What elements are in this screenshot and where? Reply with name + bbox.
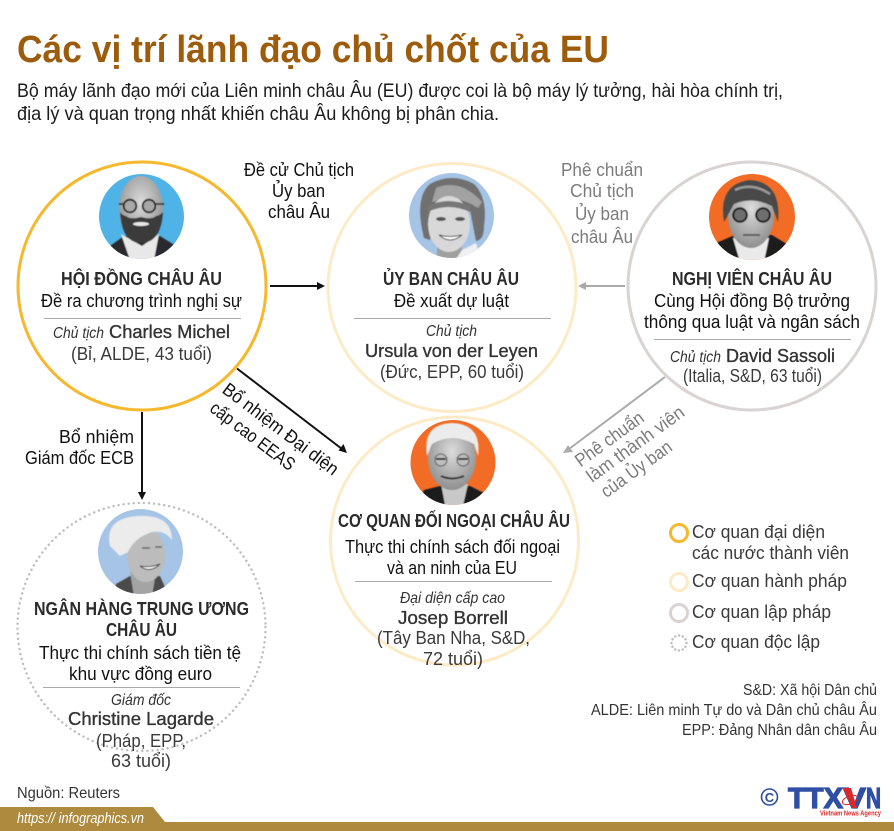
arrow label: Phê chuẩn làm thành viên của Ủy ban: làm thành viên bbox=[582, 401, 688, 486]
abbreviations note: S&D: Xã hội Dân chủ bbox=[743, 682, 877, 699]
panel: Cơ quan đối ngoại châu Âu bbox=[330, 417, 578, 669]
heading: CƠ QUAN ĐỐI NGOẠI CHÂU ÂU bbox=[338, 510, 570, 531]
leader bbox=[377, 590, 530, 669]
leader: Christine Lagarde bbox=[68, 708, 214, 729]
panel: Ngân hàng Trung ương châu Âu bbox=[18, 503, 266, 771]
arrow label: Bổ nhiệm Giám đốc ECB bbox=[25, 426, 134, 468]
arrow label: Phê chuẩn Chủ tịch Ủy ban châu Âu: Ủy ban bbox=[575, 203, 629, 224]
role bbox=[345, 536, 560, 578]
logo: TTXVN: C bbox=[765, 790, 775, 805]
leader: Ursula von der Leyen bbox=[365, 340, 538, 361]
role: Cùng Hội đồng Bộ trưởng bbox=[654, 290, 850, 311]
arrow: Nghị viện to Ủy ban bbox=[578, 282, 625, 290]
role: khu vực đồng euro bbox=[69, 663, 212, 684]
portrait: David Sassoli bbox=[708, 174, 796, 264]
logo: TTXVN: V bbox=[843, 783, 867, 815]
abbreviations note: EPP: Đảng Nhân dân châu Âu bbox=[682, 720, 877, 739]
leader bbox=[53, 321, 230, 364]
arrow label: Phê chuẩn Chủ tịch Ủy ban châu Âu: châu Âu bbox=[571, 226, 633, 247]
role bbox=[644, 290, 860, 332]
arrow: Hội đồng to Cơ quan đối ngoại bbox=[237, 368, 347, 453]
logo: TTXVN: N bbox=[866, 783, 881, 815]
leader: David Sassoli bbox=[726, 345, 835, 366]
leader bbox=[670, 345, 835, 386]
role: thông qua luật và ngân sách bbox=[644, 311, 860, 332]
leader: (Bỉ, ALDE, 43 tuổi) bbox=[71, 343, 212, 364]
role: Thực thi chính sách tiền tệ bbox=[39, 642, 241, 663]
heading: CHÂU ÂU bbox=[106, 619, 177, 640]
intro text: Bộ máy lãnh đạo mới của Liên minh châu Âu (EU) được coi là bộ máy lý tưởng, hài hòa chính trị, bbox=[17, 79, 783, 102]
leader: Chủ tịch bbox=[670, 349, 721, 366]
heading: NGÂN HÀNG TRUNG ƯƠNG bbox=[34, 598, 249, 619]
arrow label: Bổ nhiệm Giám đốc ECB: Giám đốc ECB bbox=[25, 447, 134, 468]
source: Nguồn: Reuters bbox=[17, 785, 120, 802]
logo: TTXVN: TTX bbox=[788, 783, 844, 815]
heading: NGHỊ VIÊN CHÂU ÂU bbox=[672, 268, 832, 289]
arrow label: Phê chuẩn Chủ tịch Ủy ban châu Âu: Phê chuẩn bbox=[561, 159, 643, 180]
leader: 63 tuổi) bbox=[111, 750, 171, 771]
leader bbox=[68, 692, 214, 771]
logo: TTXVN: Vietnam News Agency bbox=[820, 810, 881, 818]
legend item: độc lập: Cơ quan độc lập bbox=[692, 631, 820, 652]
website url: https:// infographics.vn bbox=[17, 810, 144, 827]
leader: (Pháp, EPP, bbox=[96, 730, 186, 751]
leader: (Tây Ban Nha, S&D, bbox=[377, 627, 530, 648]
legend item: lập pháp: Cơ quan lập pháp bbox=[692, 601, 831, 622]
leader: Charles Michel bbox=[109, 321, 230, 342]
arrow label: Đề cử Chủ tịch Ủy ban châu Âu: châu Âu bbox=[268, 201, 330, 222]
leader: Josep Borrell bbox=[398, 607, 508, 628]
leader: Giám đốc bbox=[111, 692, 171, 709]
arrow label: Đề cử Chủ tịch Ủy ban châu Âu: Đề cử Chủ tịch bbox=[244, 159, 354, 180]
legend item: đại diện: các nước thành viên bbox=[692, 542, 849, 563]
arrow: Hội đồng to Ngân hàng Trung ương bbox=[138, 412, 146, 500]
intro text bbox=[17, 79, 783, 125]
arrow: Nghị viện to Cơ quan đối ngoại bbox=[563, 377, 665, 453]
leader: Chủ tịch bbox=[53, 325, 104, 342]
footer band bbox=[0, 807, 894, 831]
title: Các vị trí lãnh đạo chủ chốt của EU bbox=[17, 29, 609, 71]
legend item: hành pháp: Cơ quan hành pháp bbox=[692, 570, 847, 591]
legend bbox=[670, 521, 849, 652]
panel: Ủy ban châu Âu bbox=[328, 164, 576, 412]
leader bbox=[365, 323, 538, 382]
leader: Chủ tịch bbox=[426, 323, 477, 340]
leader: 72 tuổi) bbox=[423, 648, 483, 669]
heading bbox=[34, 598, 249, 640]
arrow label: Bổ nhiệm Đại diện cấp cao EEAS: Bổ nhiệm Đại diện bbox=[219, 378, 343, 479]
portrait: Christine Lagarde bbox=[98, 508, 184, 598]
role: Đề xuất dự luật bbox=[394, 290, 509, 311]
arrow label: Phê chuẩn làm thành viên của Ủy ban: của Ủy ban bbox=[596, 436, 676, 502]
portrait: Josep Borrell bbox=[410, 420, 496, 510]
portrait: Charles Michel bbox=[98, 174, 184, 262]
role: Đề ra chương trình nghị sự bbox=[41, 290, 242, 311]
arrow label: Bổ nhiệm Giám đốc ECB: Bổ nhiệm bbox=[59, 426, 134, 447]
intro text: địa lý và quan trọng nhất khiến châu Âu không bị phân chia. bbox=[17, 102, 499, 125]
panel: Hội đồng châu Âu bbox=[18, 162, 266, 410]
portrait: Ursula von der Leyen bbox=[408, 172, 494, 262]
leader: Đại diện cấp cao bbox=[400, 590, 505, 607]
panel: Nghị viện châu Âu bbox=[628, 162, 876, 410]
legend item: đại diện: Cơ quan đại diện bbox=[692, 521, 825, 542]
leader: (Đức, EPP, 60 tuổi) bbox=[380, 361, 524, 382]
arrow label: Phê chuẩn làm thành viên của Ủy ban: Phê chuẩn bbox=[571, 407, 648, 471]
role bbox=[39, 642, 241, 684]
role: và an ninh của EU bbox=[387, 557, 517, 578]
logo: TTXVN bbox=[762, 783, 881, 818]
heading: HỘI ĐỒNG CHÂU ÂU bbox=[61, 268, 222, 289]
legend item: đại diện bbox=[670, 521, 849, 563]
arrow label: Đề cử Chủ tịch Ủy ban châu Âu bbox=[244, 159, 354, 222]
arrow: Hội đồng to Ủy ban bbox=[270, 282, 325, 290]
arrow label: Phê chuẩn Chủ tịch Ủy ban châu Âu bbox=[561, 159, 643, 247]
role: Thực thi chính sách đối ngoại bbox=[345, 536, 560, 557]
arrow label: Phê chuẩn Chủ tịch Ủy ban châu Âu: Chủ tịch bbox=[570, 180, 634, 201]
leader: (Italia, S&D, 63 tuổi) bbox=[683, 365, 822, 386]
heading: ỦY BAN CHÂU ÂU bbox=[383, 268, 519, 289]
abbreviations note bbox=[591, 682, 877, 739]
arrow label: Đề cử Chủ tịch Ủy ban châu Âu: Ủy ban bbox=[272, 180, 325, 201]
arrow label: Bổ nhiệm Đại diện cấp cao EEAS: cấp cao EEAS bbox=[206, 397, 300, 475]
